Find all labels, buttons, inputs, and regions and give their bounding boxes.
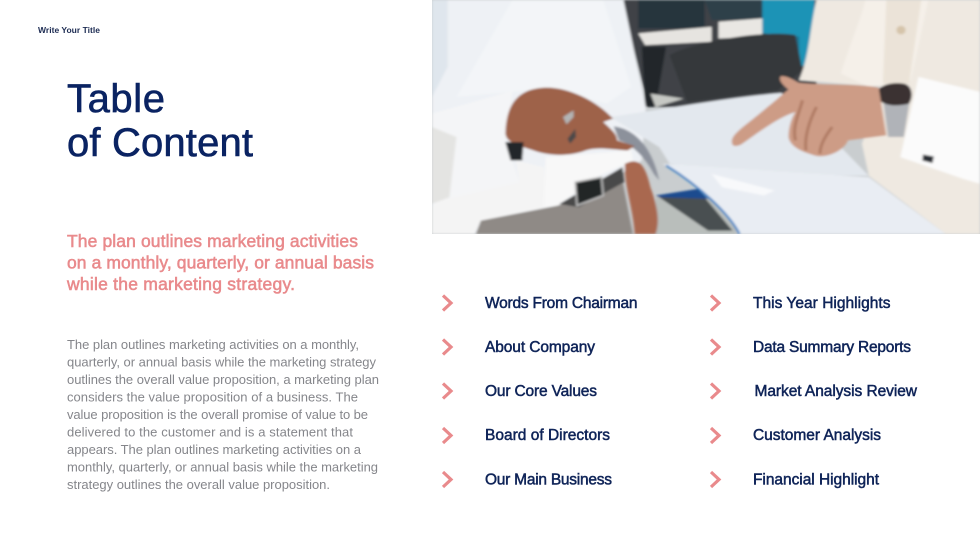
right shirt (799, 0, 980, 234)
body paragraph: considers the value proposition of a business. The (67, 390, 358, 404)
subheading: The plan outlines marketing activities (67, 231, 358, 251)
photo: two people reviewing a document (432, 0, 980, 234)
small heading: Write Your Title (38, 25, 100, 35)
body paragraph: outlines the overall value proposition, a marketing plan (67, 372, 379, 387)
body paragraph: monthly, quarterly, or annual basis while the marketing (67, 460, 378, 474)
subheading (66, 231, 374, 294)
list: right column: Data Summary Reports (753, 339, 911, 356)
icons: left column chevrons (443, 296, 451, 487)
icons: right column chevrons (711, 296, 719, 487)
list: right column: This Year Highlights (753, 295, 891, 312)
list: left column: Words From Chairman (485, 295, 638, 312)
list: right column: Financial Highlight (753, 472, 880, 488)
document (610, 93, 869, 176)
body paragraph: quarterly, or annual basis while the marketing strategy (67, 354, 376, 370)
left lower hand (625, 161, 658, 234)
body paragraph: The plan outlines marketing activities on a monthly, (67, 337, 359, 352)
right hand (732, 76, 886, 156)
body paragraph: strategy outlines the overall value proposition. (67, 477, 330, 492)
watch (883, 99, 910, 137)
body paragraph (67, 337, 379, 492)
body paragraph: value proposition is the overall promise of value to be (67, 407, 368, 422)
title: of Content (67, 121, 253, 165)
left shirt (432, 0, 646, 234)
list: left column: Our Core Values (485, 383, 597, 400)
title (67, 77, 253, 165)
title: Table (67, 77, 165, 121)
list: right column: Customer Analysis (753, 427, 881, 444)
list: left column: Our Main Business (485, 472, 612, 488)
subheading: on a monthly, quarterly, or annual basis (67, 252, 374, 272)
list: right column (753, 295, 918, 488)
list: right column: Market Analysis Review (754, 383, 918, 400)
subheading: while the marketing strategy. (66, 274, 295, 294)
list: left column: Board of Directors (485, 427, 610, 444)
body paragraph: delivered to the customer and is a statement that (67, 424, 353, 440)
list: left column (485, 295, 638, 488)
trousers and belt (476, 181, 633, 234)
list: left column: About Company (485, 339, 595, 356)
body paragraph: appears. The plan outlines marketing activities on a (67, 442, 362, 457)
left hand (505, 88, 635, 155)
